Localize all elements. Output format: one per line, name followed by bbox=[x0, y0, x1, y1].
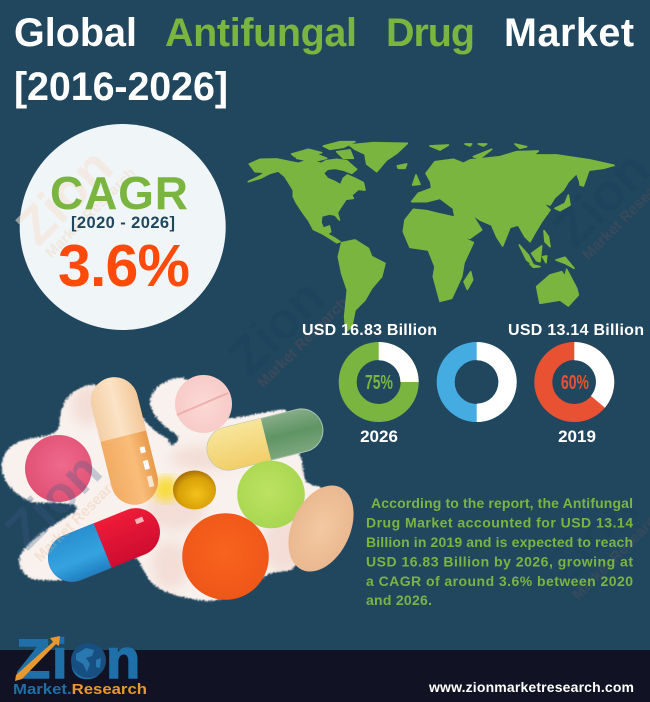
description text: and 2026. bbox=[366, 592, 432, 608]
donut row labels: USD 13.14 Billion bbox=[508, 322, 644, 339]
north america bbox=[248, 159, 365, 243]
description text: a CAGR of around 3.6% between 2020 bbox=[366, 573, 633, 589]
pale pink tablet bbox=[175, 375, 232, 433]
watermark: centre: Zion bbox=[217, 268, 336, 386]
watermark: in circle: Zion bbox=[5, 138, 124, 256]
donut row labels bbox=[302, 322, 644, 339]
title: Global bbox=[14, 11, 137, 55]
peach oval tablet bbox=[275, 475, 367, 582]
title: Market bbox=[504, 11, 634, 55]
title: Drug bbox=[386, 11, 475, 55]
new guinea bbox=[556, 257, 574, 268]
description text: According to the report, the Antifungal bbox=[371, 495, 633, 511]
pink tablet bbox=[25, 435, 92, 502]
logo globe bbox=[71, 643, 106, 678]
africa bbox=[403, 209, 473, 301]
donut: 2019: 60% bbox=[561, 372, 589, 394]
logo bbox=[13, 627, 147, 698]
orange capsule bbox=[86, 372, 163, 510]
donut: 2026: 75% bbox=[365, 372, 393, 394]
amber softgel bbox=[173, 470, 216, 510]
world map bbox=[248, 142, 614, 332]
south america bbox=[338, 240, 385, 332]
donut: 2026 bbox=[348, 342, 419, 446]
amber glow bbox=[153, 476, 179, 502]
CAGR period: [2020 - 2026] bbox=[71, 214, 175, 232]
title bbox=[14, 11, 634, 109]
watermark: centre: Market Research bbox=[254, 295, 351, 391]
logo wordmark: Zion bbox=[16, 627, 140, 690]
donut row labels: USD 16.83 Billion bbox=[302, 322, 437, 339]
donut: 2019 bbox=[543, 342, 614, 446]
title: Antifungal bbox=[165, 11, 357, 55]
australia bbox=[537, 269, 578, 306]
orange tablet bbox=[182, 513, 269, 600]
madagascar bbox=[464, 272, 473, 289]
description text: Drug Market accounted for USD 13.14 bbox=[366, 515, 633, 531]
logo tagline: Market. Research bbox=[13, 682, 147, 698]
japan and kamchatka bbox=[555, 172, 588, 211]
panel: CAGR circle bbox=[5, 124, 226, 330]
description text: Billion in 2019 and is expected to reach bbox=[366, 534, 633, 550]
uk and iceland bbox=[397, 144, 527, 185]
title: [2016-2026] bbox=[14, 65, 228, 109]
website url: www.zionmarketresearch.com bbox=[428, 679, 634, 695]
powder shading bbox=[72, 385, 307, 589]
description text: USD 16.83 Billion by 2026, growing at bbox=[366, 554, 633, 570]
yellow and green capsule bbox=[203, 404, 327, 475]
arctic islands bbox=[292, 142, 355, 162]
logo arrow bbox=[15, 636, 60, 681]
CAGR label: CAGR bbox=[50, 167, 188, 219]
blue and red capsule bbox=[41, 501, 167, 589]
donut: 2026: 2026 bbox=[360, 427, 398, 446]
donut: middle bbox=[446, 342, 517, 422]
CAGR value: 3.6% bbox=[58, 233, 190, 299]
watermark: text block: Zion bbox=[532, 480, 650, 598]
eurasia bbox=[412, 151, 614, 246]
description text bbox=[366, 495, 633, 608]
footer band bbox=[0, 650, 650, 702]
watermark: in circle: Market Research bbox=[42, 165, 139, 261]
donut: 2019: 2019 bbox=[558, 427, 596, 446]
lime tablet bbox=[237, 461, 305, 528]
greenland bbox=[349, 143, 407, 172]
powder bbox=[2, 377, 325, 601]
pills illustration bbox=[0, 372, 367, 601]
watermark: over pills: Market Research bbox=[31, 469, 128, 565]
southeast asia islands bbox=[519, 231, 550, 267]
